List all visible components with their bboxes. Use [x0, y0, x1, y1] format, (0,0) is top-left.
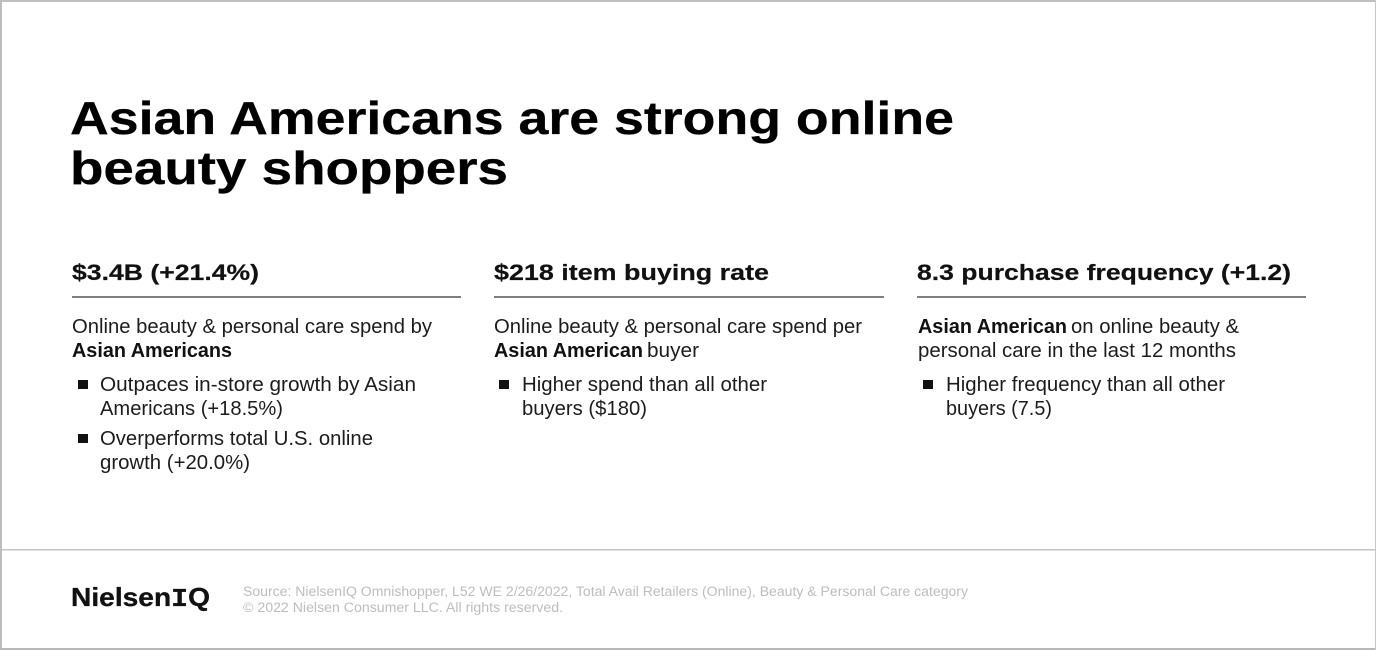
bullet: higher frequency [923, 374, 1225, 420]
bullet: in-store growth [78, 374, 416, 420]
description: spend: Online beauty & personal care spend by [72, 316, 432, 338]
metric heading: 8.3: 8.3 purchase frequency (+1.2) [917, 260, 1291, 285]
panel: online spend [72, 260, 461, 474]
bullet: higher frequency: buyers (7.5) [946, 398, 1052, 420]
bullet: total online growth [78, 428, 373, 474]
source note: © 2022 Nielsen Consumer LLC. All rights reserved. [243, 600, 563, 615]
title: Asian Americans are strong online [70, 92, 954, 144]
bullet: total online growth: Overperforms total U.S. online [100, 428, 373, 450]
bullet: in-store growth: Outpaces in-store growth by Asian [100, 374, 416, 396]
bullet: higher spend [499, 374, 767, 420]
panel: purchase frequency [917, 260, 1306, 420]
panel: item buying rate [494, 260, 884, 420]
bullet: higher spend: Higher spend than all other [522, 374, 767, 396]
title [70, 92, 954, 194]
metric heading: $3.4B: $3.4B (+21.4%) [72, 260, 259, 285]
description: spend per buyer [494, 316, 862, 362]
description: frequency: Asian American [918, 316, 1067, 338]
bullet: in-store growth: Americans (+18.5%) [100, 398, 283, 420]
bullet: higher spend: buyers ($180) [522, 398, 647, 420]
description: spend per buyer: Asian American [494, 340, 643, 362]
description: spend per buyer: buyer [647, 340, 699, 362]
source note [243, 584, 968, 615]
description: frequency: on online beauty & [1071, 316, 1240, 338]
description: frequency [918, 316, 1240, 362]
metric heading: $218: $218 item buying rate [494, 260, 769, 285]
logo: NielsenIQ: Nielsen IQ [71, 582, 210, 614]
bullet: total online growth: growth (+20.0%) [100, 452, 250, 474]
description: spend: Asian Americans [72, 340, 232, 362]
description: frequency: personal care in the last 12 months [918, 340, 1236, 362]
bullet: higher frequency: Higher frequency than all other [946, 374, 1225, 396]
source note: Source: NielsenIQ Omnishopper, L52 WE 2/26/2022, Total Avail Retailers (Online), Beauty & Personal Care category [243, 584, 968, 599]
description: spend per buyer: Online beauty & personal care spend per [494, 316, 862, 338]
description: spend [72, 316, 432, 362]
title: beauty shoppers [70, 142, 508, 194]
